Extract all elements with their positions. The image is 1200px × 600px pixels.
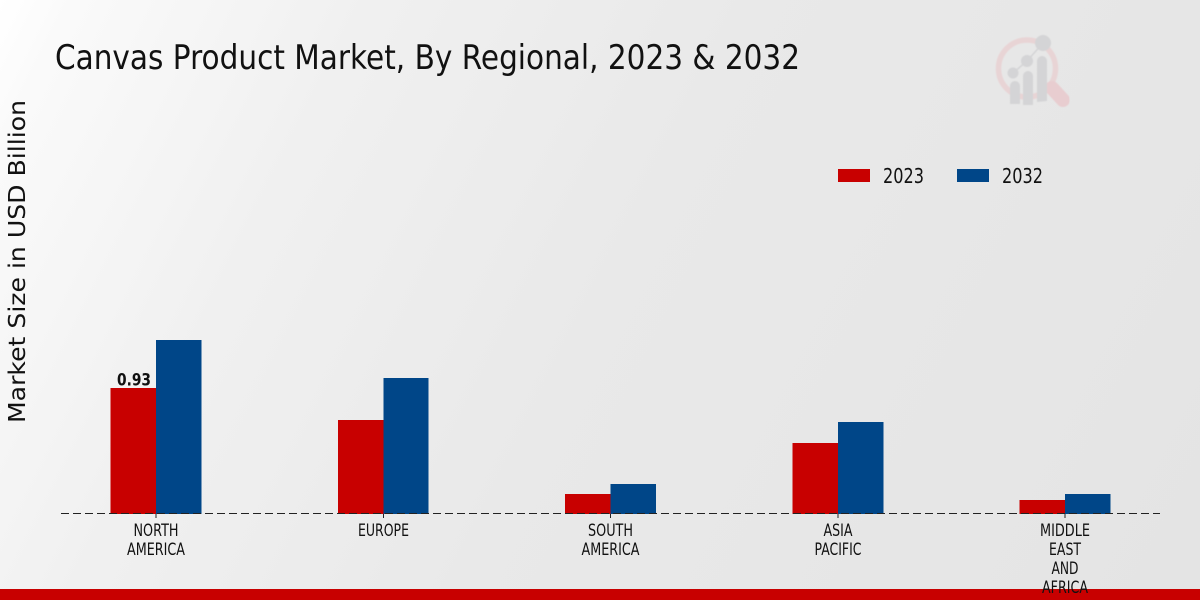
- label: Asia Pacific: [814, 521, 862, 559]
- label: Middle East and Africa: EAST: [1049, 540, 1082, 559]
- label: Middle East and Africa: AFRICA: [1042, 578, 1089, 597]
- label: South America: SOUTH: [588, 521, 633, 540]
- bars: Asia Pacific: [792, 422, 884, 514]
- data label: 0.93: [117, 370, 151, 390]
- x axis labels: [127, 521, 1090, 597]
- bottom bar: [0, 589, 1200, 600]
- bars: Europe: [338, 378, 428, 514]
- label: North America: NORTH: [134, 521, 178, 540]
- y axis title: Market Size in USD Billion: [5, 100, 31, 423]
- legend item: 2023: 2023: [883, 164, 924, 188]
- label: Middle East and Africa: [1040, 521, 1090, 597]
- legend: [838, 164, 1043, 188]
- baseline axis: [61, 512, 1160, 514]
- legend item: 2023: [838, 164, 924, 188]
- icon: watermark logo: [998, 35, 1063, 105]
- label: Asia Pacific: ASIA: [824, 521, 853, 540]
- bar chart: [61, 340, 1160, 518]
- title: Canvas Product Market, By Regional, 2023 & 2032: [55, 38, 800, 78]
- bars: North America: [110, 340, 202, 514]
- label: Middle East and Africa: AND: [1052, 559, 1078, 578]
- label: Middle East and Africa: MIDDLE: [1040, 521, 1090, 540]
- bars: South America: [565, 484, 656, 514]
- label: North America: [127, 521, 186, 559]
- label: Europe: EUROPE: [358, 521, 409, 540]
- legend item: 2032: 2032: [1002, 164, 1043, 188]
- label: South America: AMERICA: [582, 540, 640, 559]
- bars: Middle East and Africa: [1020, 494, 1110, 514]
- legend item: 2032: [957, 164, 1043, 188]
- label: Asia Pacific: PACIFIC: [814, 540, 862, 559]
- label: South America: [582, 521, 640, 559]
- label: North America: AMERICA: [127, 540, 186, 559]
